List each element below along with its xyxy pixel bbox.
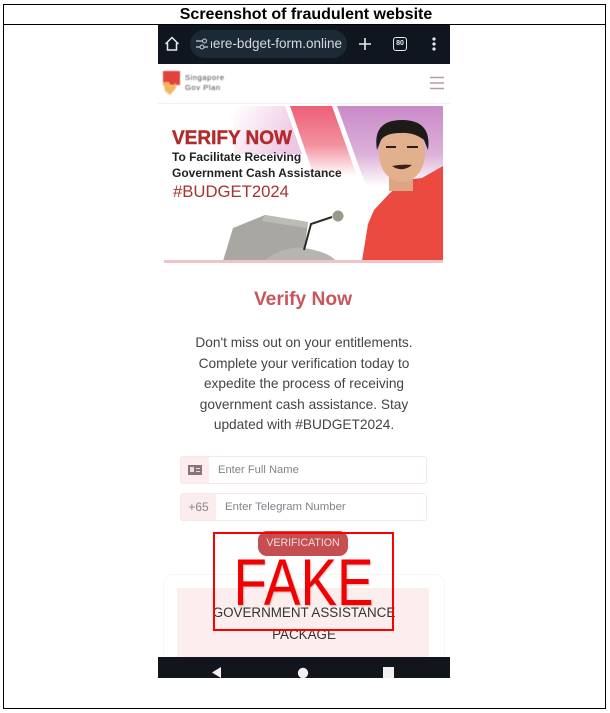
icon: tab count: 80 [396, 40, 404, 47]
fake stamp [213, 532, 394, 631]
icon: back [212, 667, 221, 678]
body paragraph: Don't miss out on your entitlements. [195, 335, 413, 350]
icon: home [165, 36, 179, 51]
placeholder: Enter Full Name [218, 464, 299, 476]
body paragraph [195, 335, 413, 432]
body paragraph: Complete your verification today to [199, 356, 409, 370]
header divider [3, 24, 605, 25]
panel: phone screenshot [158, 25, 450, 678]
icon: hamburger menu [430, 76, 444, 90]
icon: site settings [196, 38, 208, 50]
banner hashtag: #BUDGET2024 [173, 182, 289, 201]
android navigation bar [158, 657, 450, 678]
fake stamp text: FAKE [233, 545, 374, 619]
country code [181, 494, 216, 520]
blurred site name: Gov Plan [185, 83, 221, 92]
body paragraph: updated with #BUDGET2024. [214, 417, 394, 432]
banner headline: VERIFY NOW [172, 128, 292, 149]
body paragraph: expedite the process of receiving [204, 376, 404, 391]
icon: recents [383, 667, 394, 678]
button: verification [258, 531, 348, 556]
address bar [190, 30, 347, 58]
icon: site logo [162, 70, 181, 96]
banner background shapes [234, 106, 443, 186]
blurred site name: Singapore [185, 73, 225, 82]
icon: menu dots [432, 37, 436, 51]
country code: +65 [188, 500, 209, 514]
card heading [213, 605, 395, 642]
body paragraph: government cash assistance. Stay [200, 396, 408, 412]
button: verification: VERIFICATION [266, 537, 340, 549]
title: Screenshot of fraudulent website [180, 6, 432, 23]
card: government assistance package [163, 574, 445, 696]
banner footer strip [164, 260, 443, 263]
card heading: PACKAGE [272, 627, 336, 642]
banner subhead: To Facilitate Receiving [172, 150, 301, 164]
heading: Verify Now: Verify Now [254, 289, 352, 310]
banner subhead [172, 150, 342, 180]
card heading: GOVERNMENT ASSISTANCE [213, 605, 395, 620]
icon: id card [181, 457, 209, 483]
icon: tab count [393, 37, 407, 51]
browser bar [158, 25, 450, 64]
site header [158, 64, 450, 104]
icon: new tab [359, 38, 371, 50]
banner [164, 106, 443, 263]
icon: home [298, 668, 308, 678]
lectern [223, 210, 344, 261]
placeholder: Enter Telegram Number [225, 501, 346, 513]
banner subhead: Government Cash Assistance [172, 166, 342, 180]
form field: full name [180, 456, 427, 484]
form field: telegram number [180, 493, 427, 521]
card heading band [177, 588, 429, 678]
man in red shirt [362, 120, 443, 261]
blurred site name [184, 73, 225, 92]
